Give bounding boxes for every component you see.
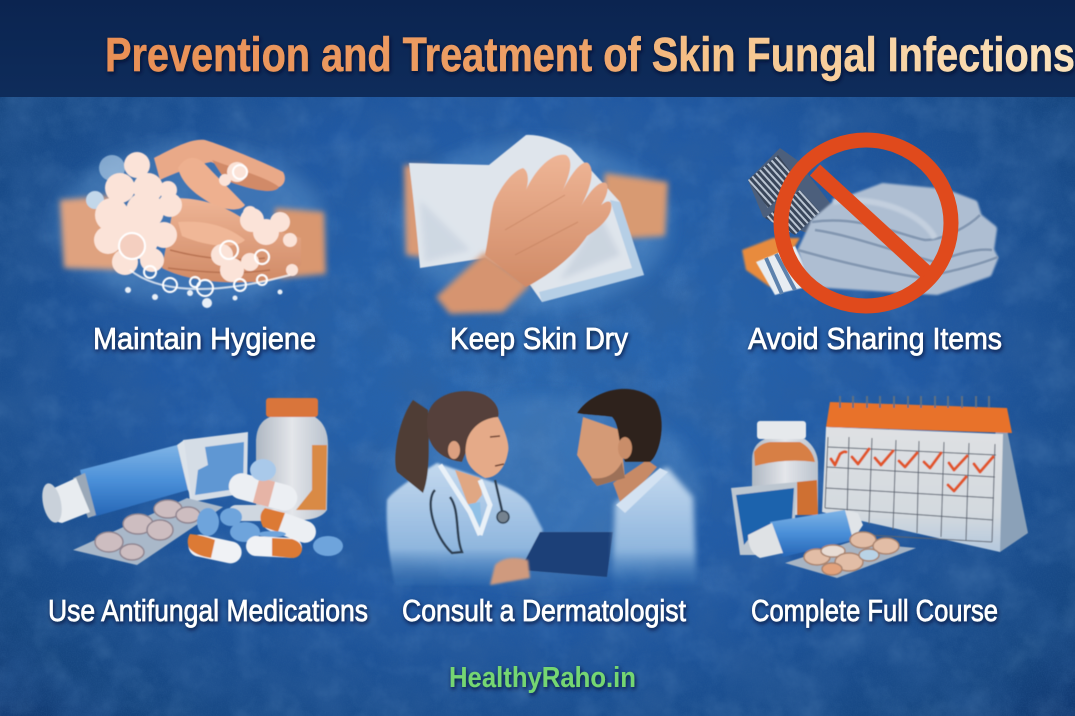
- bottle: [752, 439, 818, 515]
- label: maintain hygiene: Maintain Hygiene: [93, 321, 316, 356]
- bottle: [256, 417, 328, 520]
- foam: [86, 152, 298, 282]
- towel stack: [802, 187, 994, 291]
- tube: [770, 510, 853, 557]
- calendar side: [990, 410, 1028, 552]
- illustration: antifungal medications: [39, 398, 343, 565]
- clipboard: [520, 532, 613, 577]
- title band: [0, 0, 1075, 97]
- label: avoid sharing items: Avoid Sharing Items: [748, 321, 1002, 356]
- illustration: drying with towel: [400, 135, 670, 314]
- orange and striped towel: [742, 238, 800, 287]
- label: use antifungal medications: Use Antifungal Medications: [48, 593, 368, 628]
- sachet: [183, 432, 248, 502]
- illustration: washing hands with foam: [55, 140, 326, 308]
- comb: [748, 148, 833, 233]
- label: consult a dermatologist: Consult a Dermatologist: [402, 593, 686, 628]
- label: keep skin dry: Keep Skin Dry: [450, 321, 628, 356]
- illustration: no sharing combs and towels: [742, 140, 998, 306]
- labels: [48, 321, 1002, 628]
- sachet: [731, 482, 797, 555]
- patient: [577, 389, 697, 585]
- website credit: HealthyRaho.in: [449, 662, 636, 694]
- doctor: [387, 391, 543, 585]
- prohibition sign: [781, 140, 951, 306]
- pills and capsules: [228, 505, 278, 521]
- illustration: calendar with medication: [731, 396, 1028, 578]
- blister: [785, 542, 916, 578]
- tube: [80, 445, 188, 517]
- label: complete full course: Complete Full Course: [751, 593, 998, 628]
- illustration: doctor and patient: [380, 389, 700, 585]
- calendar header: [826, 402, 1012, 433]
- blister: [73, 498, 223, 565]
- calendar face: [822, 427, 1003, 552]
